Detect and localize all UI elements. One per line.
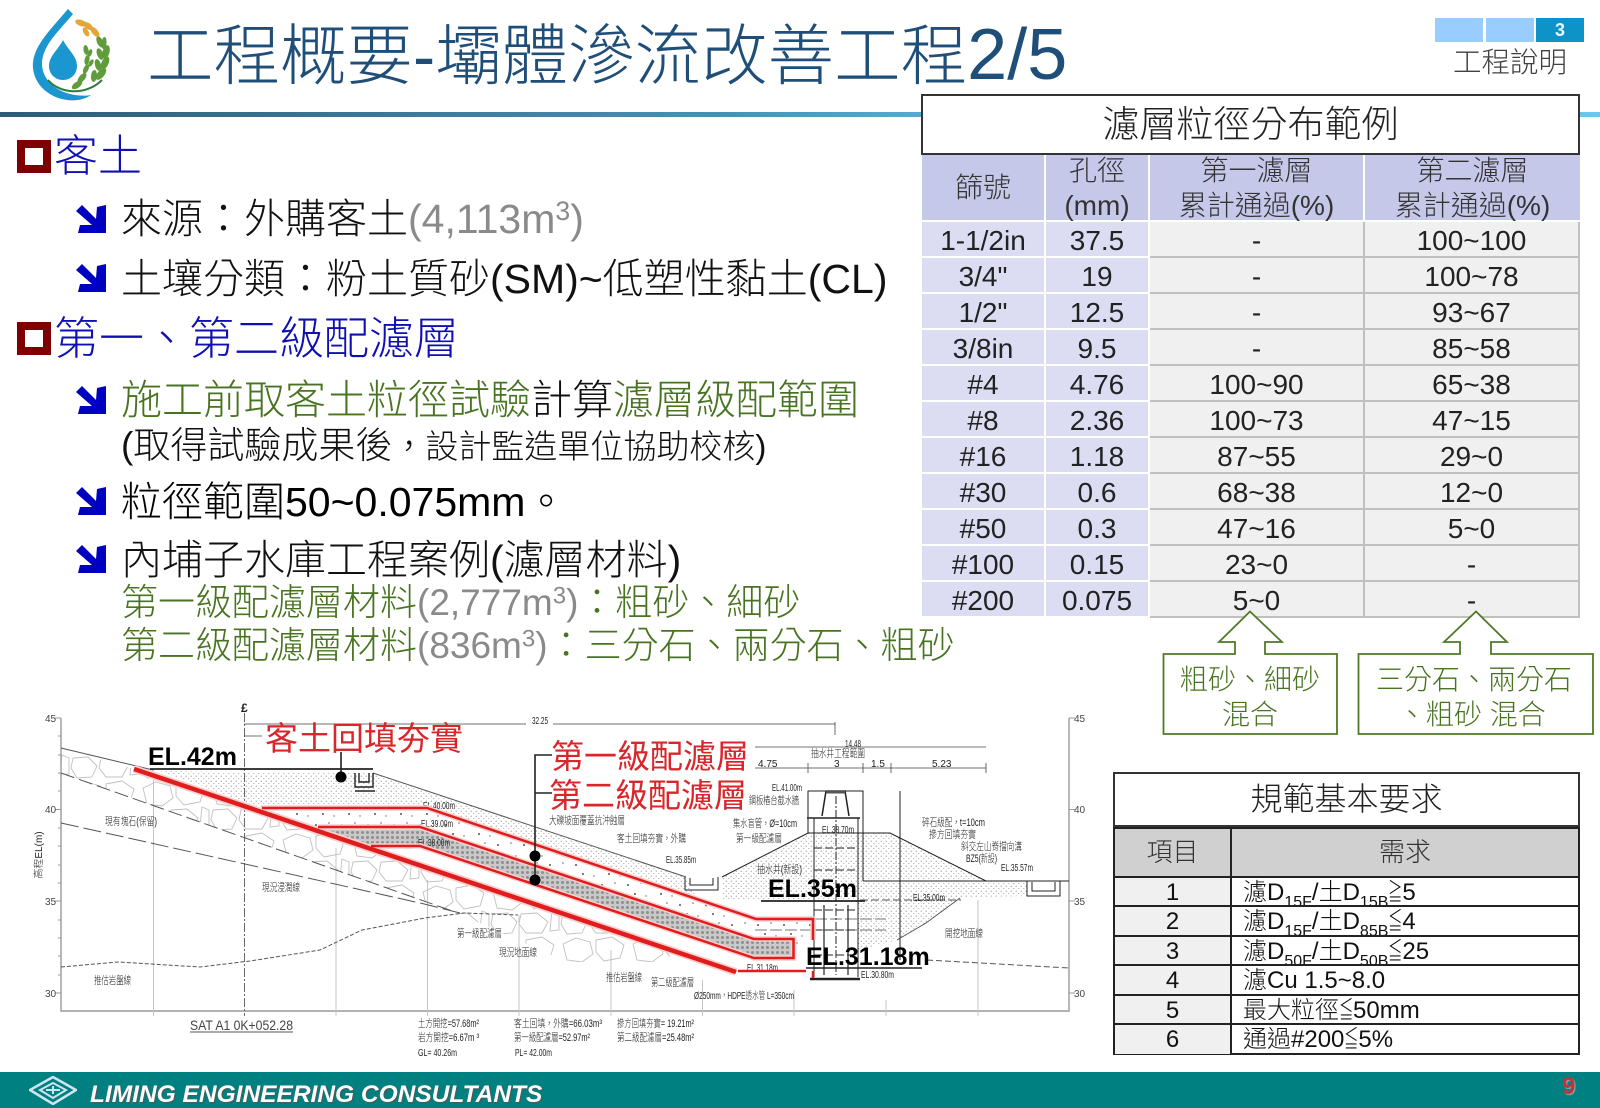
- drawing annotations: 客土回填，外購=66.03m³: [514, 1016, 602, 1030]
- drawing annotations: 第一級配濾層: [736, 831, 782, 845]
- elevation label 42m: EL.42m: [148, 743, 237, 771]
- drawing annotations: 岩方開挖=6.67m ³: [418, 1030, 479, 1044]
- drawing annotations: 30: [1074, 989, 1086, 1000]
- header rule: [0, 112, 1600, 117]
- grain size data table: 0.3: [1078, 512, 1116, 544]
- grain size data table: 23~0: [1225, 548, 1288, 580]
- drawing annotations: EL.35.85m: [666, 855, 696, 866]
- drawing annotations: [32, 701, 1086, 1059]
- drawing annotations: 第二級配濾層: [651, 975, 694, 989]
- specification title: [1113, 772, 1580, 827]
- icon: water drop and wheat logo: [32, 9, 110, 100]
- grain size data table: -: [1252, 224, 1261, 256]
- icon: company diamond logo: [29, 1076, 77, 1105]
- grain size data table: 68~38: [1217, 476, 1296, 508]
- specification table: 2: [1166, 908, 1179, 935]
- drawing annotations: 抽水井工程範圍: [811, 746, 865, 760]
- grain size data table: 29~0: [1440, 440, 1503, 472]
- grain size data table: 3/8in: [953, 332, 1013, 364]
- table title: 濾層粒徑分布範例: [1102, 104, 1398, 145]
- grain size data table: 4.76: [1070, 368, 1124, 400]
- grain size data table: 2.36: [1070, 404, 1124, 436]
- grain size data table: #16: [960, 440, 1006, 472]
- drawing annotations: 35: [1074, 897, 1086, 908]
- drawing annotations: EL.39.00m: [421, 819, 453, 830]
- drawing annotations: EL.40.00m: [423, 801, 455, 812]
- bullet: case study materials: 第二級配濾層材料(836m3)：三分石、兩分石、粗砂: [121, 625, 955, 666]
- drawing annotations: 35: [45, 897, 57, 908]
- bullet: source: 來源：外購客土(4,113m3): [121, 196, 584, 242]
- grain size data table: 93~67: [1432, 296, 1511, 328]
- pump well and mound: [355, 773, 1069, 979]
- grain size data table: [922, 154, 1580, 618]
- drawing annotations: 高程EL(m): [32, 831, 45, 879]
- grain size data table: 第二濾層: [1416, 154, 1528, 186]
- drawing annotations: EL.30.80m: [861, 970, 894, 981]
- grain size data table: 孔徑: [1069, 154, 1125, 186]
- drawing annotations: 3: [834, 759, 840, 770]
- grain size data table: 12.5: [1070, 296, 1124, 328]
- drawing annotations: 抽水井(新設): [757, 863, 802, 876]
- bullet: pre-construction test: (取得試驗成果後，設計監造單位協助校核): [121, 425, 766, 466]
- specification table: 最大粒徑 50mm: [1243, 997, 1420, 1024]
- bullet: case study materials: [76, 537, 955, 666]
- grain size data table: 0.6: [1078, 476, 1116, 508]
- specification table: ≧: [1388, 879, 1403, 906]
- grain size data table: 篩號: [955, 172, 1011, 203]
- drawing annotations: 4.75: [758, 759, 778, 770]
- grain size data table: -: [1252, 332, 1261, 364]
- drawing annotations: 大礫坡面覆蓋抗沖蝕層: [549, 813, 625, 827]
- drawing annotations: 客土回填夯實，外購: [617, 831, 686, 845]
- drawing annotations: 5.23: [932, 759, 952, 770]
- grain size data table: 85~58: [1432, 332, 1511, 364]
- grain size data table: 5~0: [1448, 512, 1495, 544]
- title: 工程概要-壩體滲流改善工程2/5: [147, 15, 1067, 95]
- elevation label 31.18m: EL.31.18m: [806, 943, 930, 971]
- bullet: case study materials: 內埔子水庫工程案例(濾層材料): [121, 537, 681, 583]
- drawing annotations: 第二級配濾層=25.48m²: [617, 1030, 694, 1044]
- grain size data table: 19: [1081, 260, 1113, 292]
- drawing annotations: 第一級配濾層: [457, 926, 502, 940]
- grain size data table: 100~78: [1424, 260, 1519, 292]
- specification table: ≦: [1388, 908, 1403, 935]
- bullet: pre-construction test: [76, 377, 859, 466]
- grain size data table: #100: [952, 548, 1014, 580]
- drawing annotations: EL.31.18m: [747, 963, 778, 974]
- drawing annotations: 30: [45, 989, 57, 1000]
- grain size data table: 12~0: [1440, 476, 1503, 508]
- grain size data table: -: [1252, 296, 1261, 328]
- bullet: grain size range: 粒徑範圍50~0.075mm。: [121, 479, 566, 525]
- specification table: 3: [1166, 938, 1179, 965]
- specification table: 1: [1166, 879, 1179, 906]
- grain size data table: #30: [960, 476, 1006, 508]
- drawing annotations: EL.35.57m: [1001, 863, 1033, 874]
- drawing annotations: 摻方回填夯實= 19.21m²: [617, 1016, 694, 1030]
- drawing annotations: 現有塊石(保留): [105, 815, 157, 828]
- callout: first filter mix: [1162, 610, 1338, 735]
- grain size data table: 65~38: [1432, 368, 1511, 400]
- axes and grid: [55, 713, 1075, 1016]
- navigation tabs: [1435, 18, 1584, 42]
- grain size data table: 100~73: [1209, 404, 1304, 436]
- specification table: 5: [1166, 997, 1179, 1024]
- grain size data table: 100~100: [1417, 224, 1526, 256]
- navigation tabs: 3: [1555, 20, 1565, 40]
- callout: second filter mix: [1358, 610, 1594, 735]
- callout: second filter mix: 三分石、兩分石: [1376, 664, 1572, 695]
- drawing annotations: 第一級配濾層=52.97m²: [514, 1030, 590, 1044]
- drawing annotations: 40: [45, 805, 57, 816]
- section label: 工程說明: [1453, 47, 1567, 79]
- specification table: 通過#200 5%: [1243, 1026, 1393, 1053]
- elevation label 35m: EL.35m: [768, 875, 857, 903]
- footer band: [0, 1072, 1600, 1108]
- grain size data table: 累計通過(%): [1395, 190, 1550, 220]
- specification table: ≦: [1344, 1026, 1359, 1053]
- drawing annotations: EL.41.00m: [772, 783, 802, 794]
- bullet: soil classification: 土壤分類：粉土質砂(SM)~低塑性黏土(CL): [121, 256, 887, 302]
- table title: [921, 94, 1580, 155]
- drawing annotations: 現況地面線: [499, 946, 537, 959]
- drawing annotations: EL.35.00m: [913, 893, 945, 904]
- drawing annotations: 摻方回填夯實: [929, 827, 976, 841]
- drawing annotations: 開挖地面線: [945, 927, 983, 940]
- drawing annotations: 40: [1074, 805, 1086, 816]
- drawing annotations: SAT A1 0K+052.28: [190, 1017, 293, 1033]
- specification table: 項目: [1146, 837, 1198, 867]
- specification table: [1113, 827, 1580, 1055]
- callout: first filter mix: 混合: [1222, 699, 1278, 730]
- bullet: pre-construction test: 施工前取客土粒徑試驗計算濾層級配範圍: [121, 377, 859, 423]
- specification table: 濾Cu 1.5~8.0: [1243, 967, 1385, 994]
- drawing annotations: Ø250mm，HDPE透水管 L=350cm: [694, 989, 794, 1002]
- grain size data table: -: [1467, 548, 1476, 580]
- drawing annotations: 土方開挖=57.68m²: [418, 1016, 479, 1030]
- grain size data table: 1-1/2in: [940, 224, 1026, 256]
- drawing annotations: EL.38.00m: [418, 838, 450, 849]
- drawing annotations: 推估岩盤線: [94, 974, 131, 987]
- specification table: 需求: [1379, 837, 1431, 867]
- callout: first filter mix: 粗砂、細砂: [1180, 664, 1320, 695]
- red filter outlines: [134, 769, 813, 978]
- grain size data table: #200: [952, 584, 1014, 616]
- drawing annotations: 現況浸潤線: [262, 881, 300, 894]
- grain size data table: 47~16: [1217, 512, 1296, 544]
- dimension lines: [244, 722, 986, 773]
- grain size data table: 1.18: [1070, 440, 1124, 472]
- specification table: 4: [1166, 967, 1179, 994]
- specification title: 規範基本要求: [1250, 781, 1442, 817]
- grain size data table: -: [1252, 260, 1261, 292]
- ground and dashed lines: [61, 748, 1069, 968]
- grain size data table: 100~90: [1209, 368, 1304, 400]
- drawing annotations: 集水盲管，Ø=10cm: [733, 816, 797, 830]
- section heading: filter layers: 第一、第二級配濾層: [54, 313, 459, 364]
- grain size data table: -: [1467, 584, 1476, 616]
- section heading: 客土: 客土: [54, 132, 142, 181]
- backfill label and leader: [265, 720, 463, 782]
- company name: LIMING ENGINEERING CONSULTANTS: [90, 1081, 542, 1108]
- soil fills: [61, 748, 1027, 962]
- grain size data table: 37.5: [1070, 224, 1124, 256]
- filter labels and leader: 第二級配濾層: [549, 777, 747, 814]
- drawing annotations: 碎石級配，t=10cm: [922, 815, 985, 829]
- drawing annotations: 45: [45, 714, 57, 725]
- grain size data table: #50: [960, 512, 1006, 544]
- drawing annotations: 45: [1074, 714, 1086, 725]
- grain size data table: 1/2": [959, 296, 1007, 328]
- bullet: case study materials: 第一級配濾層材料(2,777m3)：粗砂、細砂: [121, 582, 800, 623]
- grain size data table: 47~15: [1432, 404, 1511, 436]
- backfill label and leader: 客土回填夯實: [265, 720, 463, 757]
- drawing annotations: BZ5(新設): [966, 852, 997, 865]
- drawing annotations: PL= 42.00m: [515, 1048, 552, 1059]
- grain size data table: 0.15: [1070, 548, 1124, 580]
- specification table: ≦: [1339, 997, 1353, 1024]
- drawing annotations: 14.48: [845, 739, 861, 750]
- grain size data table: 87~55: [1217, 440, 1296, 472]
- grain size data table: 第一濾層: [1200, 154, 1312, 186]
- drawing annotations: 1.5: [871, 759, 885, 770]
- grain size data table: 9.5: [1078, 332, 1116, 364]
- grain size data table: (mm): [1064, 190, 1130, 220]
- grain size data table: #4: [967, 368, 999, 400]
- drawing annotations: GL= 40.26m: [418, 1048, 457, 1059]
- drawing annotations: 32.25: [532, 716, 548, 727]
- filter labels and leader: [530, 738, 749, 886]
- callout: second filter mix: 、粗砂 混合: [1398, 699, 1546, 730]
- drawing annotations: £: [241, 701, 248, 715]
- drawing annotations: 推估岩盤線: [606, 971, 642, 984]
- specification table: 6: [1166, 1026, 1179, 1053]
- grain size data table: #8: [967, 404, 999, 436]
- grain size data table: 累計通過(%): [1179, 190, 1334, 220]
- drawing annotations: 鋼板樁台截水牆: [749, 794, 799, 807]
- grain size data table: 0.075: [1062, 584, 1132, 616]
- specification table: ≦: [1388, 938, 1403, 965]
- drawing annotations: EL.38.70m: [822, 825, 854, 836]
- drawing annotations: 斜交左山脊擋向溝: [961, 839, 1022, 853]
- page number: 9: [1562, 1073, 1575, 1100]
- grain size data table: 5~0: [1233, 584, 1280, 616]
- filter labels and leader: 第一級配濾層: [551, 738, 749, 775]
- grain size data table: 3/4": [959, 260, 1007, 292]
